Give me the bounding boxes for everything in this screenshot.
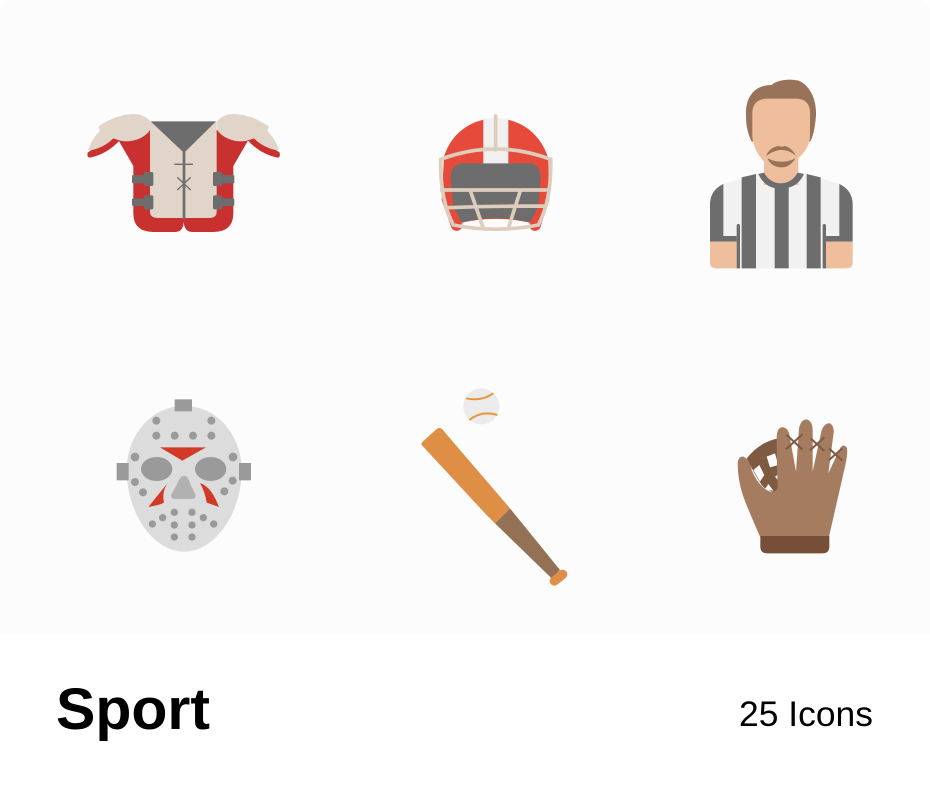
icon: baseball glove (738, 419, 847, 553)
icon: baseball and bat (421, 388, 563, 581)
icon: hockey mask (117, 399, 251, 552)
icon count: 25 Icons (739, 695, 873, 734)
icon: referee (710, 80, 853, 268)
title: Sport (56, 677, 210, 742)
icon: shoulder pads (87, 114, 280, 232)
icon: football helmet (441, 116, 551, 231)
